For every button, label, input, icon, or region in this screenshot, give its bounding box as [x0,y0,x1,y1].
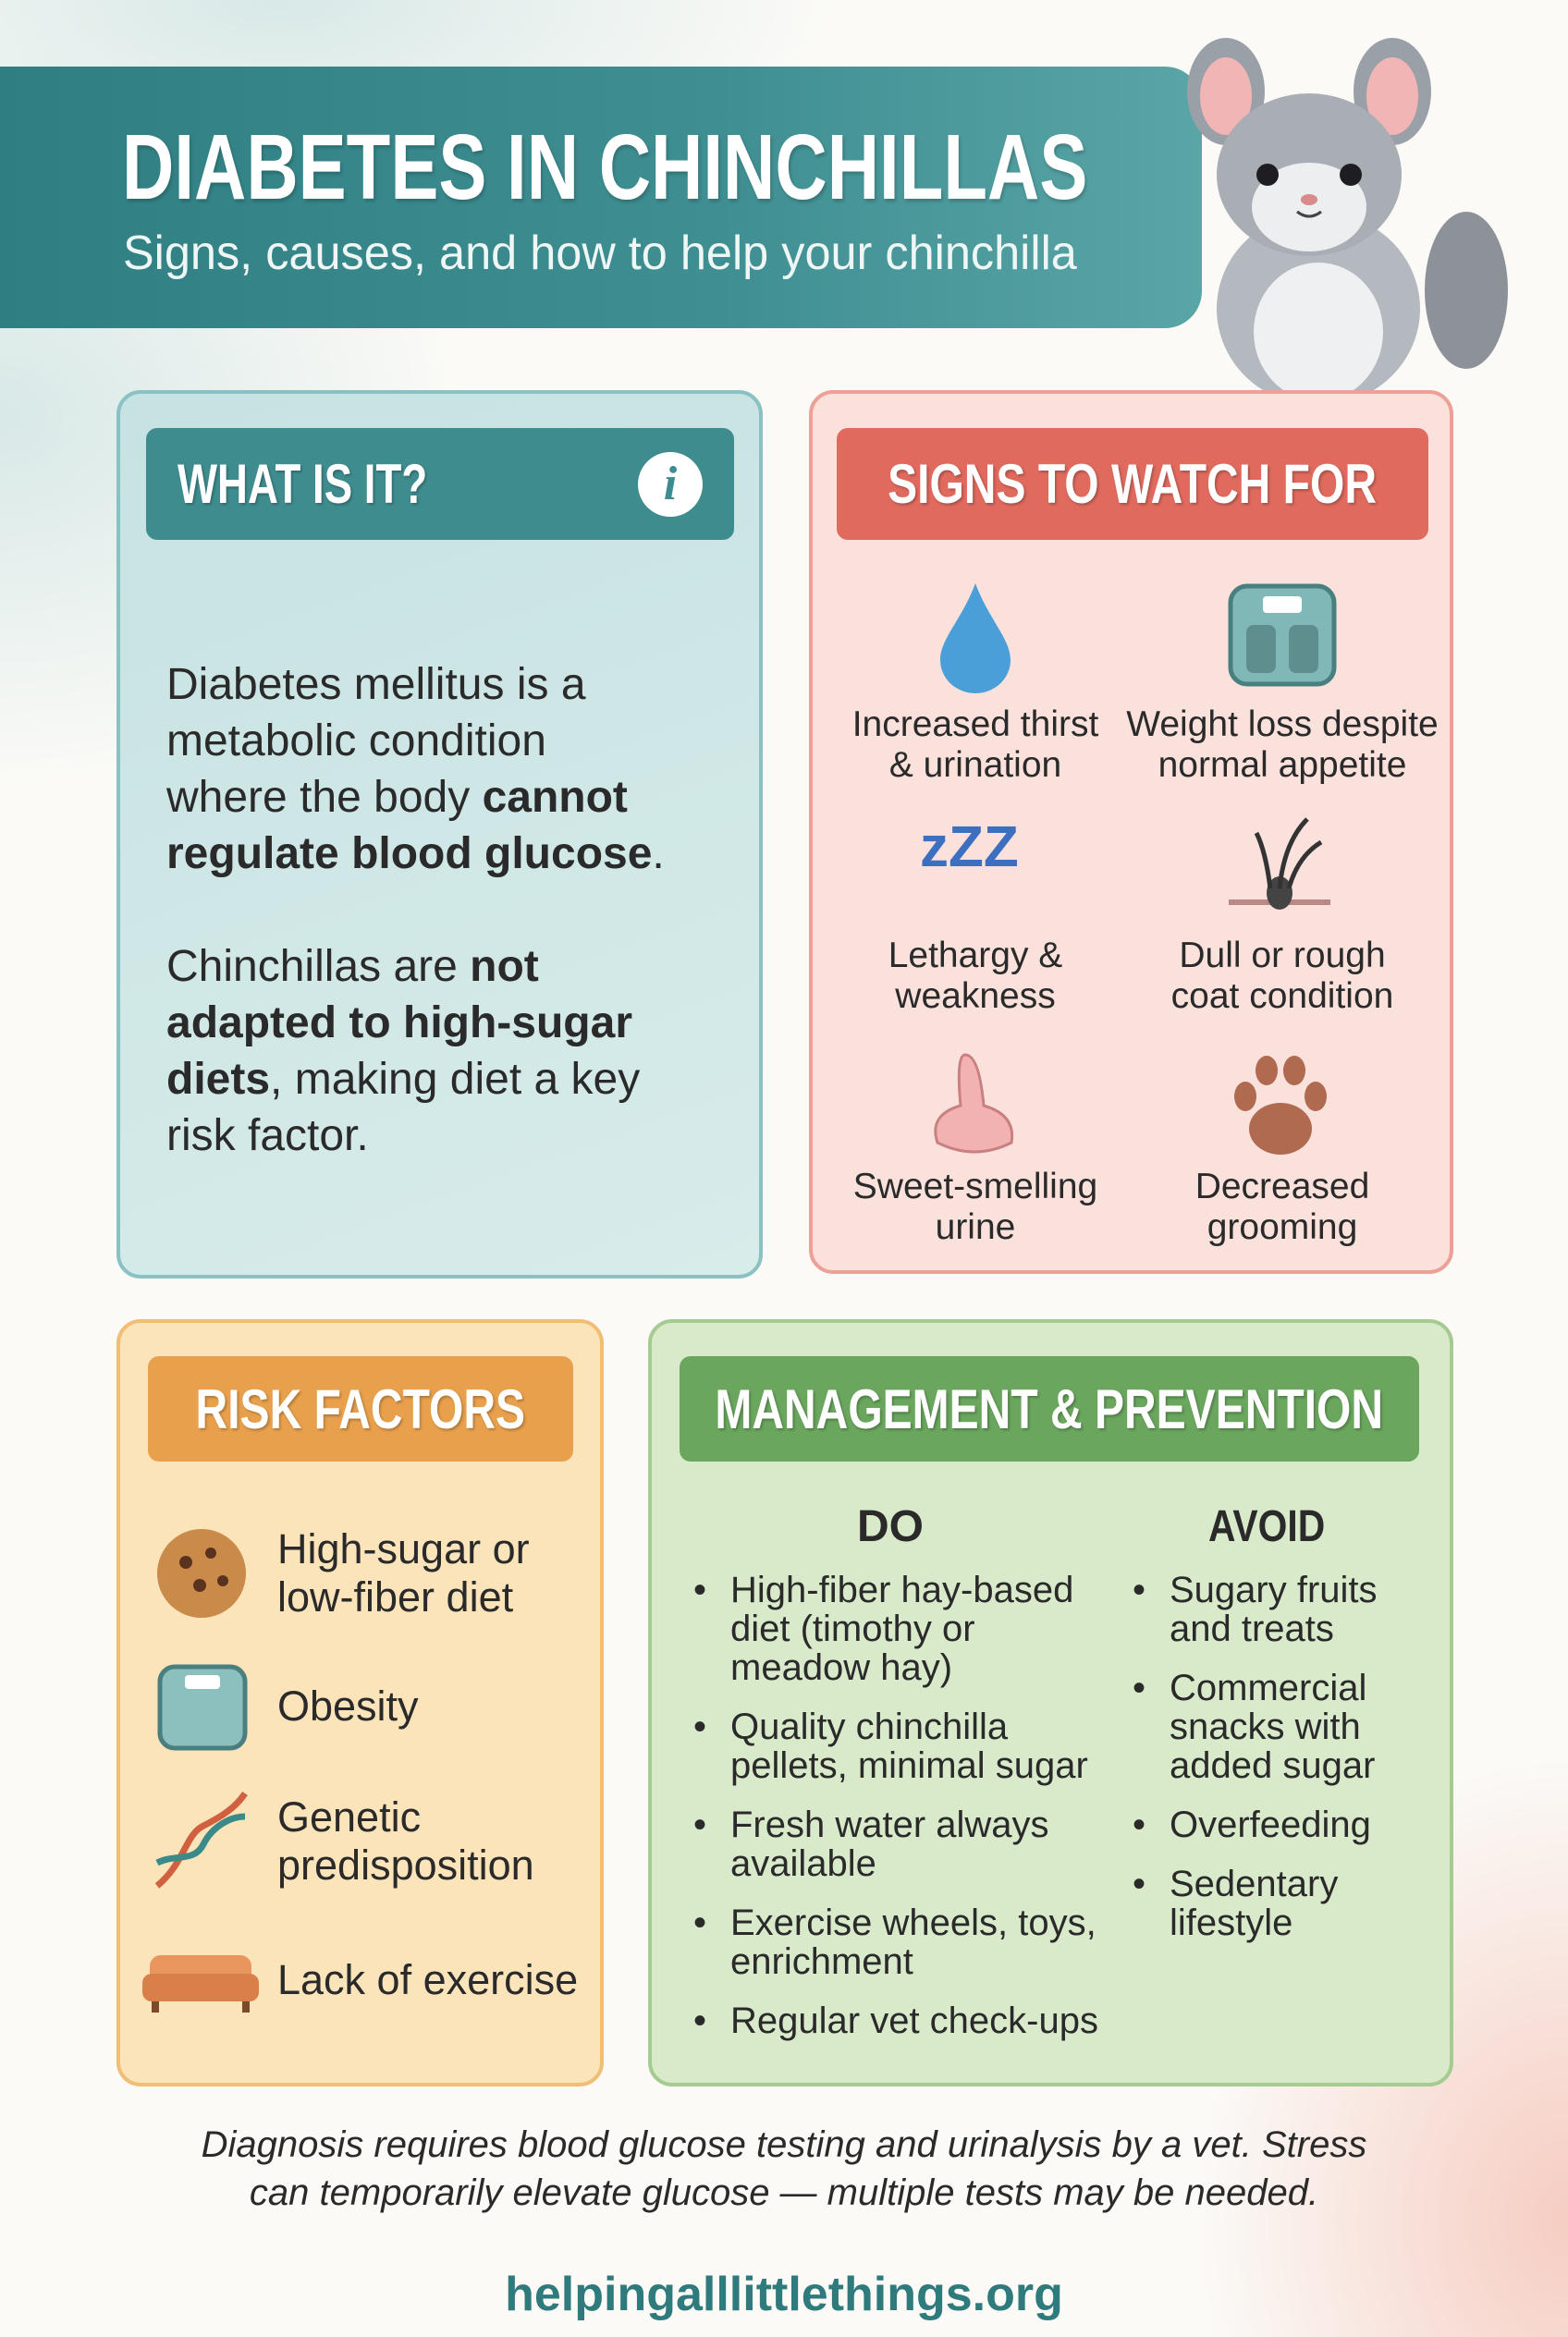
label: weight: Weight loss despite [1126,704,1439,744]
text: definition: Chinchillas are not [166,942,539,991]
icon: sofa [142,1955,259,2013]
panel: what is it [116,390,763,1279]
text: diet: low-fiber diet [277,1573,513,1621]
heading: management: MANAGEMENT & PREVENTION [716,1377,1383,1440]
url: helpingalllittlethings.org [505,2268,1063,2321]
icon: dna [155,1792,248,1889]
label: sweet urine: urine [936,1207,1015,1247]
footer note: can temporarily elevate glucose — multiple tests may be needed. [250,2172,1318,2213]
list: do: Quality chinchilla pellets, minimal sugar [730,1707,1088,1786]
icon: nose [934,1054,1013,1154]
icon: water drop [939,583,1011,693]
label: coat: coat condition [1171,976,1393,1016]
heading: management [680,1356,1419,1462]
panel: risk factors [116,1319,604,2086]
heading: avoid: AVOID [1208,1502,1325,1551]
label: coat [1171,936,1393,1016]
heading: signs: SIGNS TO WATCH FOR [888,453,1377,515]
icon: scale [1228,584,1337,686]
title: DIABETES IN CHINCHILLAS [122,116,1087,219]
icon: info: i [664,458,677,510]
text: genetic: predisposition [277,1841,534,1889]
text: definition: adapted to high-sugar [166,998,632,1047]
label: thirst [852,704,1098,785]
footer note [202,2124,1366,2213]
list: do: Regular vet check-ups [730,2001,1098,2041]
icon: info [638,452,703,517]
text: definition: diets, making diet a key [166,1055,640,1104]
label: grooming [1195,1167,1369,1247]
list: avoid [1133,1570,1378,1943]
text: definition: Diabetes mellitus is a [166,660,586,709]
heading: what is it [146,428,734,540]
label: grooming: grooming [1207,1207,1357,1247]
list: avoid: Overfeeding [1170,1805,1371,1845]
label: lethargy [888,936,1062,1016]
heading: risk factors [148,1356,573,1462]
label: coat: Dull or rough [1179,936,1386,975]
label: sweet urine [853,1167,1097,1247]
label: weight [1126,704,1439,785]
heading: what is it: WHAT IS IT? [178,453,427,515]
list: do: High-fiber hay-based diet (timothy or meadow hay) [730,1570,1073,1688]
text: exercise: Lack of exercise [277,1956,578,2003]
text: definition: where the body cannot [166,773,628,822]
list: avoid: Sugary fruits and treats [1170,1570,1378,1649]
panel: signs [809,390,1453,1274]
text: obesity: Obesity [277,1682,419,1730]
list: avoid: Commercial snacks with added sugar [1170,1668,1375,1786]
text: definition: risk factor. [166,1111,369,1160]
text: genetic: Genetic [277,1793,421,1841]
text: diet: High-sugar or [277,1525,530,1572]
heading: do: DO [857,1502,924,1551]
label: weight: normal appetite [1158,745,1406,785]
text: definition: regulate blood glucose. [166,829,665,878]
label: lethargy: weakness [895,976,1056,1016]
title banner [0,67,1202,328]
label: grooming: Decreased [1195,1167,1369,1206]
text: genetic [277,1793,534,1889]
text: definition: metabolic condition [166,716,546,765]
heading: risk factors: RISK FACTORS [196,1377,525,1440]
panel: management [648,1319,1453,2086]
icon: paw [1234,1056,1327,1155]
icon: zzz: zZZ [920,815,1019,879]
subtitle: Signs, causes, and how to help your chinchilla [123,226,1077,280]
heading: signs [837,428,1428,540]
icon: scale [157,1664,248,1751]
label: thirst: Increased thirst [852,704,1098,744]
list: do: Fresh water always available [730,1805,1049,1884]
icon: chinchilla [1187,38,1508,390]
list: do [695,1570,1098,2041]
label: thirst: & urination [889,745,1061,785]
icon: cookie [157,1529,246,1618]
text: definition [166,660,665,1160]
list: do: Exercise wheels, toys, enrichment [730,1903,1096,1982]
list: avoid: Sedentary lifestyle [1170,1864,1338,1943]
text: diet [277,1525,530,1621]
icon: hair [1229,817,1330,910]
footer note: Diagnosis requires blood glucose testing and urinalysis by a vet. Stress [202,2124,1366,2165]
label: sweet urine: Sweet-smelling [853,1167,1097,1206]
label: lethargy: Lethargy & [888,936,1062,975]
